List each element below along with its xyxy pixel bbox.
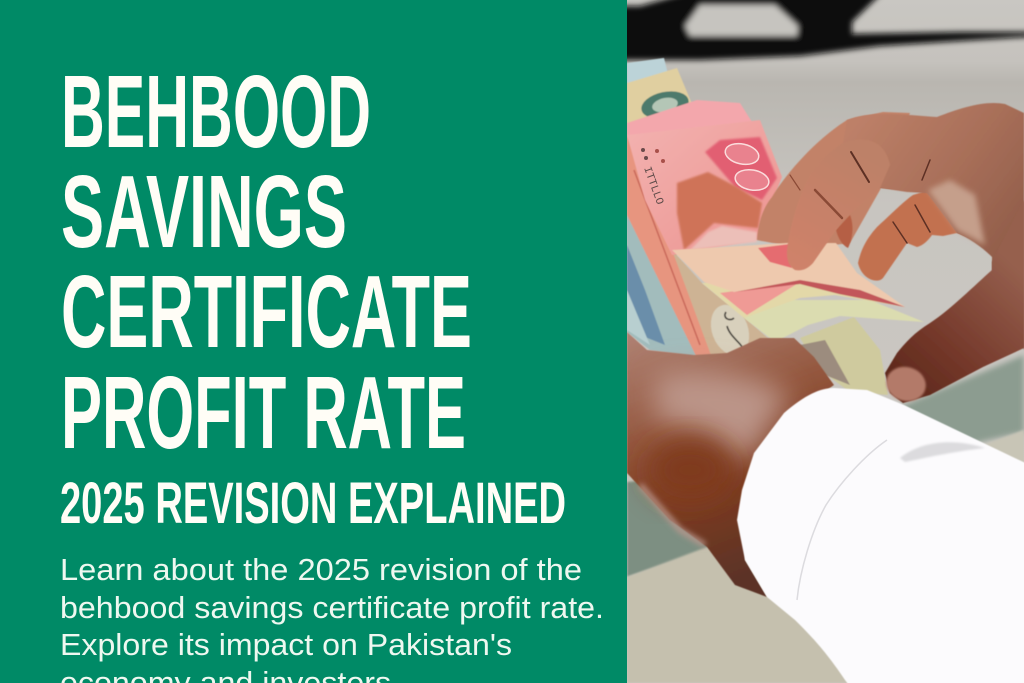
subtitle: 2025 REVISION EXPLAINED — [60, 471, 566, 536]
pink edges of stack — [627, 135, 716, 358]
left wrist — [627, 332, 834, 597]
tan note with portrait — [674, 254, 768, 354]
lower right note behind hand — [800, 317, 888, 395]
right hand: palm and back of hand — [843, 103, 1024, 350]
title: Behbood Savings Certificate Profit Rate: BEHBOOD — [61, 54, 371, 169]
folded banknotes — [672, 243, 924, 342]
panel: green title background — [0, 0, 627, 683]
body description text: behbood savings certificate profit rate. — [60, 590, 604, 625]
photo background — [627, 0, 1024, 683]
banknote: main pink rupee note — [627, 120, 782, 255]
sleeve cuff seam — [797, 440, 887, 600]
wrist highlight — [655, 370, 790, 465]
title: Behbood Savings Certificate Profit Rate — [61, 54, 472, 470]
arm edge highlight — [640, 485, 705, 545]
right hand: index finger — [786, 154, 890, 271]
wrist dark shade — [648, 440, 732, 500]
banknotes: back notes — [627, 58, 888, 395]
photo: hands counting Pakistani rupee notes — [600, 0, 1024, 683]
blurred car and shadow at top — [600, 0, 1024, 60]
title: Behbood Savings Certificate Profit Rate: CERTIFICATE — [61, 254, 472, 369]
green ledge left — [627, 480, 708, 578]
right hand: palm underlay — [880, 188, 966, 237]
blue stack of notes — [627, 215, 700, 357]
thumbnail — [885, 366, 927, 402]
body description text — [60, 552, 604, 683]
banknote: main pink rupee note: ITTLLO — [640, 165, 665, 207]
right hand: back finger — [858, 192, 958, 282]
finger creases — [790, 152, 930, 243]
beige floor — [627, 546, 846, 683]
body description text: Explore its impact on Pakistan's — [60, 627, 512, 662]
right hand: left finger behind — [757, 112, 910, 246]
beige strip right — [989, 430, 1024, 462]
green ledge right — [901, 354, 1024, 443]
title: Behbood Savings Certificate Profit Rate: SAVINGS — [61, 154, 347, 269]
right hand: thumb — [885, 200, 1024, 403]
palm inner highlight — [928, 180, 985, 245]
title: Behbood Savings Certificate Profit Rate: PROFIT RATE — [61, 355, 466, 470]
sleeve fold shadow — [900, 442, 985, 462]
body description text: Learn about the 2025 revision of the — [60, 552, 582, 587]
right hand: ring finger behind — [836, 215, 852, 248]
white shirt sleeve — [737, 388, 1024, 683]
